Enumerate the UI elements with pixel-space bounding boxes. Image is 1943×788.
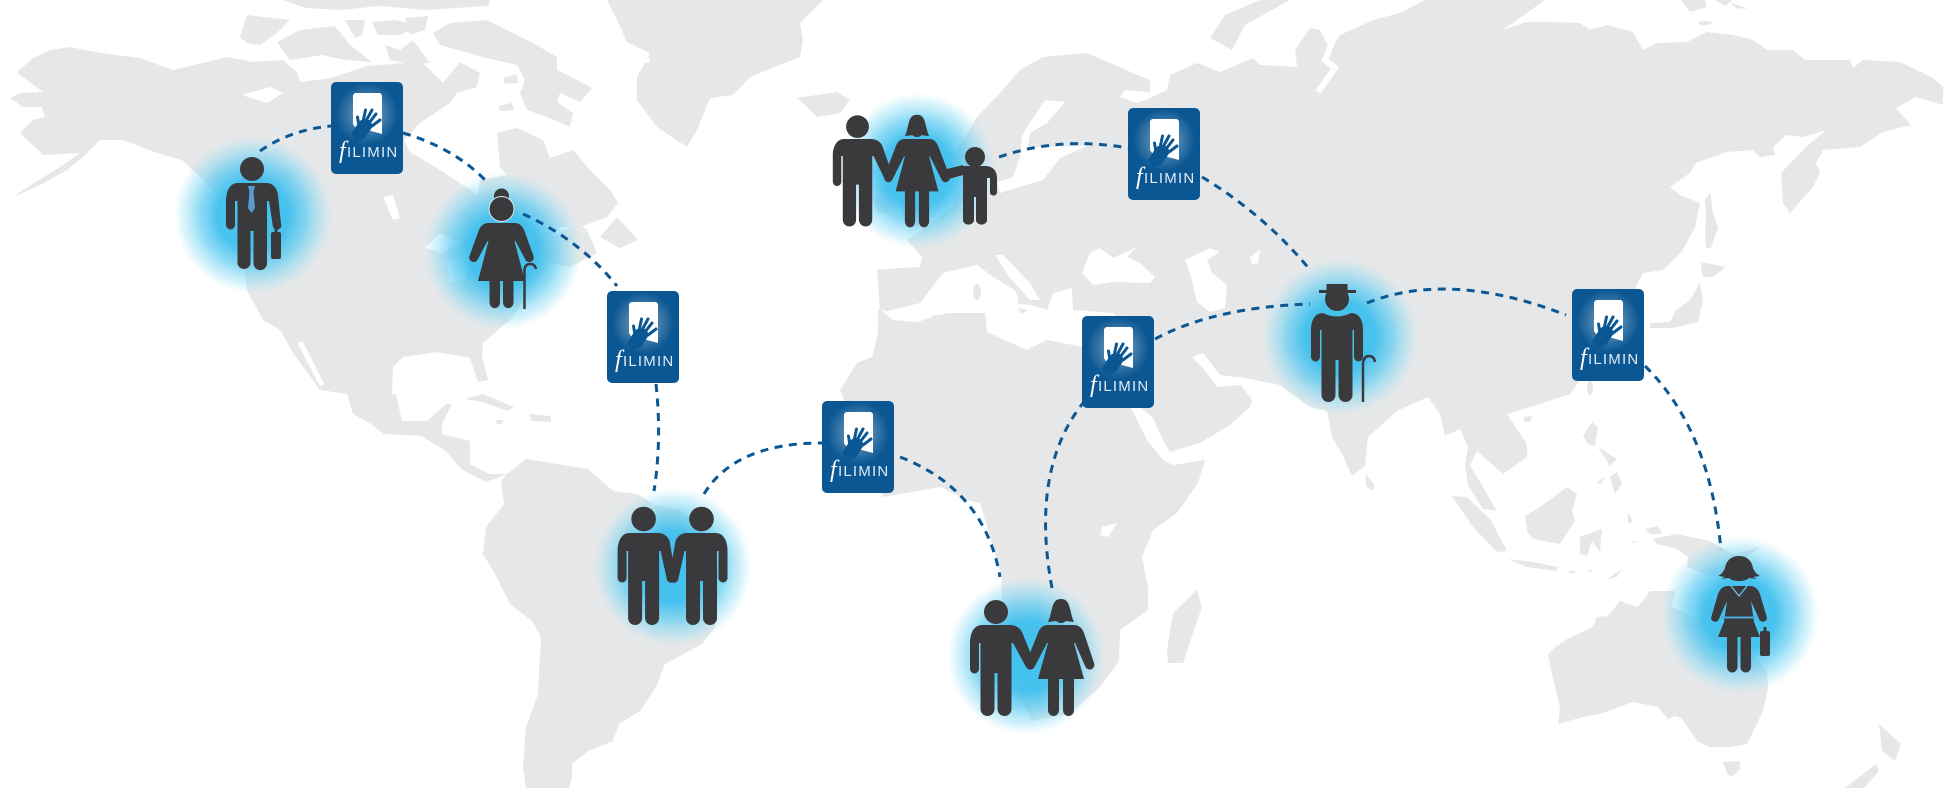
map: South America (483, 459, 718, 788)
couple woman (1026, 599, 1094, 716)
people: two men holding hands (618, 507, 728, 625)
logo badge: Filimin, West Africa: f (830, 457, 837, 483)
person: businessman with briefcase (226, 157, 281, 270)
logo badge: Filimin, Eastern Europe: f (1136, 164, 1143, 190)
people: family of three (833, 115, 997, 227)
dashed connection lines (260, 126, 1721, 588)
map: Eurasia (877, 0, 1943, 511)
couple man (970, 600, 1035, 716)
map: inland water of North America (242, 50, 650, 385)
logo badge: Filimin, Atlantic (607, 291, 679, 383)
map: seas of Eurasia (880, 30, 1337, 387)
logo badge: Filimin, Canada (331, 82, 403, 174)
logo badge: Filimin, West Africa (822, 401, 894, 493)
person: businesswoman with briefcase (1711, 556, 1770, 673)
logo badge: Filimin, Canada: ilimin (347, 139, 398, 162)
family child (943, 147, 997, 225)
map: Asian and Pacific islands (1210, 0, 1760, 579)
logo badge: Filimin, Eastern Europe: ilimin (1144, 165, 1195, 188)
person: elderly woman with cane (469, 188, 536, 309)
right man (669, 507, 728, 625)
logo badge: Filimin, Canada: f (339, 138, 346, 164)
logo badge: Filimin, Middle East: ilimin (1098, 373, 1149, 396)
map: Lake Victoria (1100, 523, 1117, 537)
map: Mediterranean islands and British Isles (873, 187, 1028, 314)
glow halos behind the people (174, 93, 1819, 735)
logo badge: Filimin, Atlantic: ilimin (623, 348, 674, 371)
logo badge: Filimin, West Africa: ilimin (838, 458, 889, 481)
family mother (884, 115, 950, 227)
logo badge: Filimin, Middle East: f (1090, 372, 1097, 398)
map: Tasmania and New Zealand (1723, 724, 1901, 788)
map: Caribbean islands (464, 394, 551, 424)
map: North America (10, 47, 618, 482)
left man (618, 507, 676, 625)
logo badge: Filimin, Atlantic: f (615, 347, 622, 373)
people: couple holding hands (970, 599, 1094, 716)
logo badge: Filimin, China: f (1580, 345, 1587, 371)
logo badge: Filimin, China (1572, 289, 1644, 381)
people: elderly man with hat and cane (1311, 284, 1375, 402)
logo badge: Filimin, Middle East (1082, 316, 1154, 408)
logo badge: Filimin, Eastern Europe (1128, 108, 1200, 200)
map: Arctic islands (240, 0, 638, 248)
map: Madagascar (1167, 590, 1202, 663)
map: Africa (840, 308, 1205, 721)
family father (833, 115, 893, 226)
map: Greenland and Iceland (607, 0, 850, 147)
logo badge: Filimin, China: ilimin (1588, 346, 1639, 369)
map: Australia (1548, 591, 1768, 747)
